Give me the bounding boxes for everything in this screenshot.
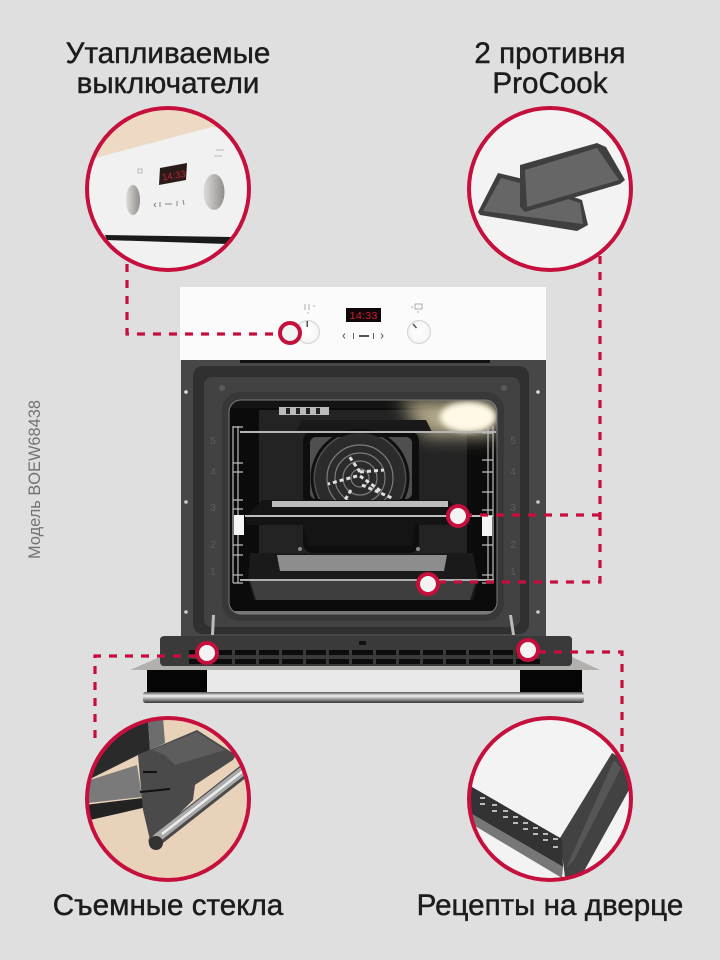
marker: upper tray <box>448 506 468 526</box>
upper tray <box>520 143 625 212</box>
shadow under upper tray <box>303 525 415 546</box>
fan back panel <box>303 431 419 553</box>
title: two trays: ProCook <box>492 67 608 100</box>
upper tray <box>245 500 493 525</box>
marker: door right <box>518 640 538 660</box>
recipe labels <box>480 797 558 848</box>
callout: hidden switches <box>80 100 260 270</box>
handle supports <box>147 670 582 693</box>
grill element <box>279 407 329 415</box>
lower tray <box>478 173 588 231</box>
callout: trays <box>469 108 631 270</box>
marker: door left <box>197 643 217 663</box>
door frame right <box>560 753 628 877</box>
dark inner door <box>92 722 150 778</box>
buttons <box>154 200 184 207</box>
model label: Модель BOEW68438 <box>25 400 44 559</box>
upper rack side lines <box>240 431 496 433</box>
shelf numbers <box>210 436 516 578</box>
shelf numbers: 2 <box>210 540 216 551</box>
caption: removable glass: Съемные стекла <box>53 889 284 922</box>
recipe strip <box>471 787 563 867</box>
title: hidden switches <box>66 37 270 100</box>
gap behind handle <box>207 670 520 692</box>
oven front frame <box>181 360 546 640</box>
shelf numbers: 1 <box>210 567 216 578</box>
marker: switch <box>280 323 300 343</box>
door hinges <box>211 615 515 635</box>
oven control panel <box>180 287 546 360</box>
oven cavity <box>229 400 497 614</box>
black strip <box>89 798 143 820</box>
knobs <box>126 185 140 215</box>
shelf numbers: 5 <box>210 436 216 447</box>
wood background <box>96 110 218 158</box>
display <box>346 308 381 322</box>
marker: lower tray <box>418 574 438 594</box>
white clips <box>234 515 244 535</box>
door top <box>160 636 572 666</box>
lower tray <box>240 553 494 600</box>
handle rod <box>155 771 244 841</box>
title: hidden switches: Утапливаемые <box>66 37 270 70</box>
shelf numbers: 3 <box>510 503 516 514</box>
caption: recipes on door: Рецепты на дверце <box>417 889 683 922</box>
dashed connector lines <box>95 256 622 755</box>
title: two trays: 2 противня <box>474 37 626 70</box>
title: hidden switches: выключатели <box>77 67 259 100</box>
wood window <box>195 760 233 785</box>
door vents <box>189 650 540 664</box>
door handle <box>143 692 584 703</box>
black strip <box>105 235 232 244</box>
left knob <box>296 320 320 344</box>
top light <box>400 400 497 436</box>
callout: recipes on door <box>465 718 640 880</box>
side racks <box>233 426 493 583</box>
display: 14:33 <box>350 310 378 322</box>
shelf numbers: 5 <box>510 436 516 447</box>
callout: hidden switches: 14:33 <box>161 169 187 183</box>
right knob <box>407 320 431 344</box>
callout: removable glass <box>85 718 249 880</box>
menu buttons <box>343 333 383 339</box>
shelf numbers: 4 <box>510 467 516 478</box>
program icons <box>305 304 422 313</box>
fan <box>310 428 410 500</box>
shelf numbers: 4 <box>210 467 216 478</box>
door side profile <box>138 730 236 840</box>
glass pane <box>88 765 142 803</box>
door glass edge <box>130 657 600 670</box>
gray post <box>148 718 165 750</box>
shelf numbers: 2 <box>510 540 516 551</box>
title: two trays <box>474 37 626 100</box>
shelf numbers: 1 <box>510 567 516 578</box>
small display <box>159 163 187 185</box>
oven <box>130 287 600 703</box>
shelf numbers: 3 <box>210 503 216 514</box>
